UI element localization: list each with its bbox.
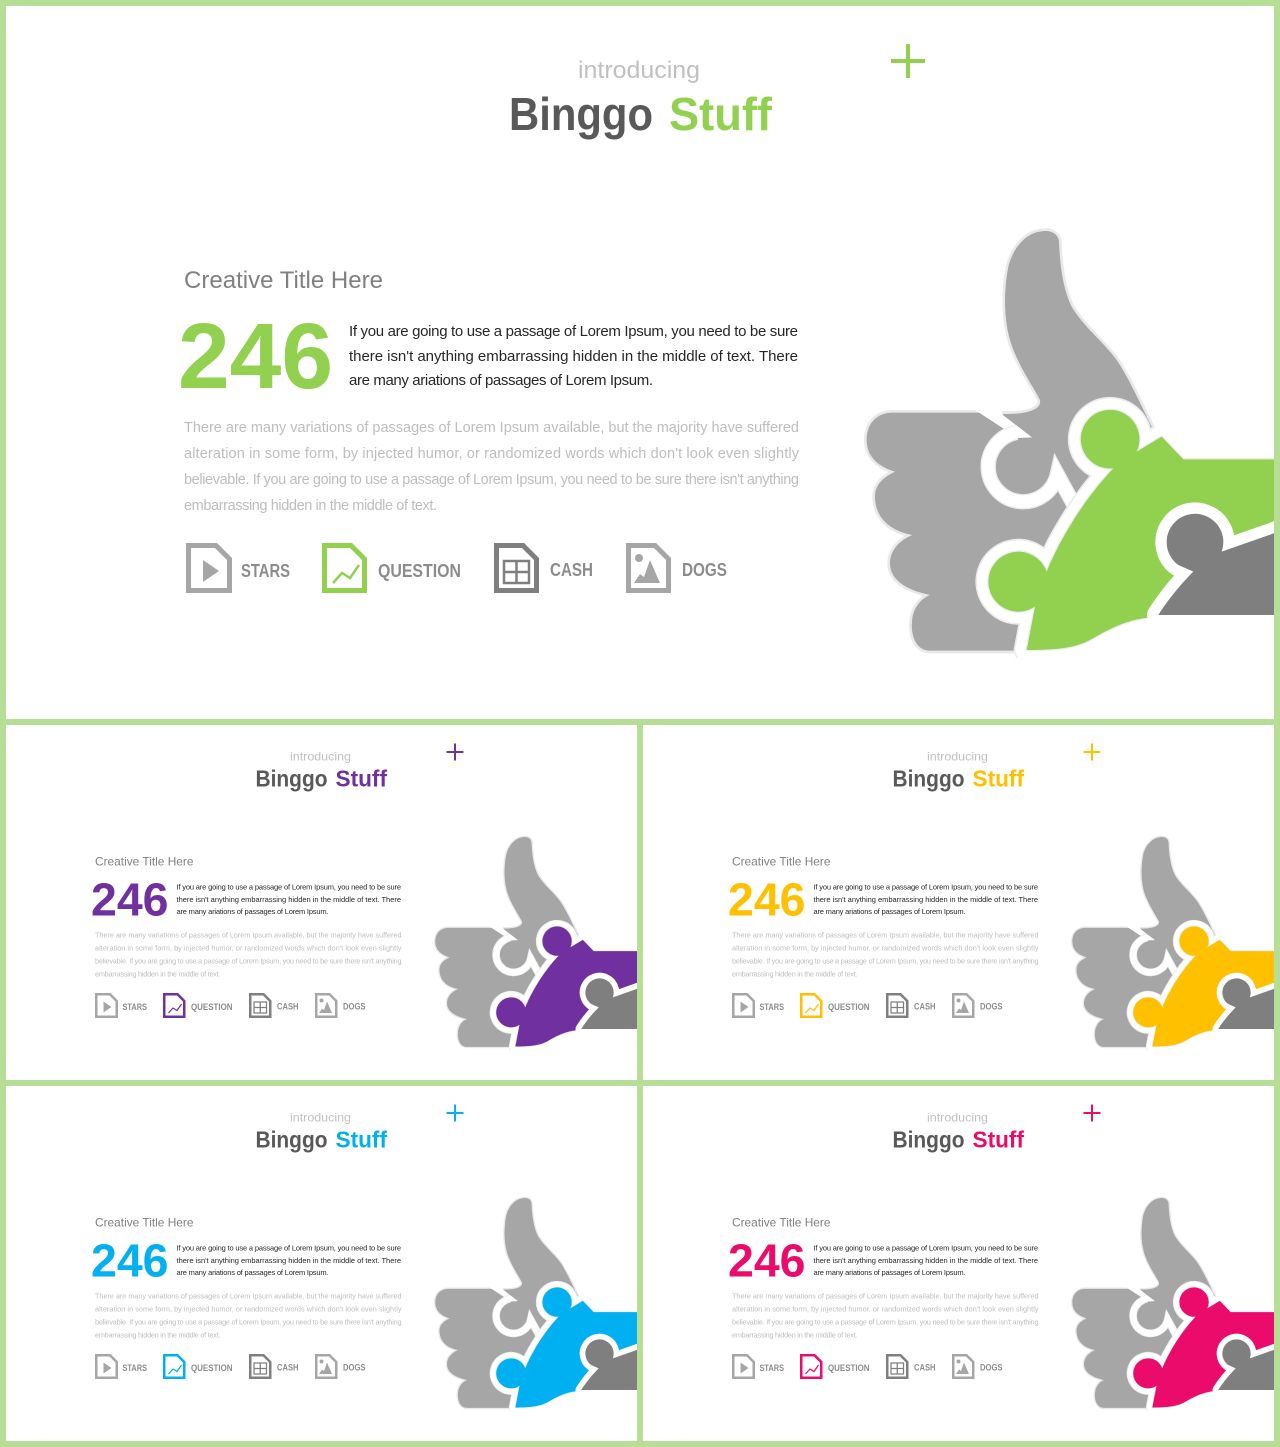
text block: intro paragraph: are many ariations of passages of Lorem Ipsum. <box>176 907 328 916</box>
text block: intro paragraph: there isn't anything embarrassing hidden in the middle of text. There <box>176 1256 401 1265</box>
text block: gray paragraph: believable. If you are going to use a passage of Lorem Ipsum, you need to be sure there isn't anything <box>95 956 402 966</box>
icon: table file <box>496 546 536 590</box>
text block: gray paragraph: alteration in some form, by injected humor, or randomized words which don't look even slightly <box>95 944 402 952</box>
icon: table file <box>887 1355 907 1378</box>
title: introducing <box>290 1110 351 1124</box>
title: Stuff <box>972 1126 1024 1152</box>
title <box>892 1110 1024 1152</box>
label: cash: CASH <box>914 1002 936 1012</box>
title: Binggo <box>892 766 964 792</box>
label: dogs: DOGS <box>980 1362 1002 1372</box>
panel: blue slide <box>6 1086 644 1441</box>
title: Binggo <box>256 766 328 792</box>
title: introducing <box>927 1110 988 1124</box>
text block: gray paragraph: There are many variations of passages of Lorem Ipsum available, but the majority have suffered <box>95 1292 402 1300</box>
icon: chart file <box>324 546 364 590</box>
title: Stuff <box>336 1126 387 1152</box>
icon: table file <box>250 994 270 1017</box>
text block: gray paragraph: There are many variations of passages of Lorem Ipsum available, but the majority have suffered <box>95 930 402 940</box>
title: Stuff <box>669 88 773 140</box>
icon: picture file <box>953 994 973 1017</box>
text block: gray paragraph: embarrassing hidden in the middle of text. <box>95 970 220 978</box>
text block: gray paragraph <box>184 420 800 514</box>
text block: gray paragraph: alteration in some form, by injected humor, or randomized words which don't look even slightly <box>184 446 800 462</box>
label: stars: STARS <box>241 561 290 581</box>
text block: gray paragraph: There are many variations of passages of Lorem Ipsum available, but the majority have suffered <box>732 930 1038 940</box>
title <box>256 750 387 792</box>
icon: puzzle thumbs up hand <box>435 837 644 1047</box>
icon: plus <box>446 1104 464 1122</box>
text block: intro paragraph: If you are going to use a passage of Lorem Ipsum, you need to be sure <box>176 882 401 892</box>
panel: purple slide <box>6 725 644 1080</box>
label: dogs: DOGS <box>682 560 727 580</box>
panel: main green slide <box>6 6 1280 719</box>
title: Binggo <box>509 88 653 140</box>
text block: intro paragraph <box>814 882 1038 916</box>
label: question: QUESTION <box>378 561 461 581</box>
label: dogs: DOGS <box>343 1002 366 1012</box>
icon row <box>96 1355 366 1378</box>
text block: gray paragraph: embarrassing hidden in the middle of text. <box>95 1330 220 1340</box>
icon: plus <box>1084 744 1100 760</box>
label: dogs: DOGS <box>343 1362 366 1372</box>
icon row <box>188 546 727 590</box>
text block: gray paragraph: alteration in some form, by injected humor, or randomized words which don't look even slightly <box>732 1304 1039 1314</box>
text block: gray paragraph: believable. If you are going to use a passage of Lorem Ipsum, you need to be sure there isn't anything <box>732 956 1038 966</box>
icon: play file <box>733 994 754 1017</box>
icon: puzzle thumbs up hand <box>867 231 1280 651</box>
title: introducing <box>927 750 988 764</box>
icon row <box>733 1355 1002 1378</box>
title <box>256 1110 387 1152</box>
label: question: QUESTION <box>191 1363 232 1373</box>
label: stars: STARS <box>122 1002 147 1012</box>
label: dogs: DOGS <box>980 1002 1002 1012</box>
title: introducing <box>290 750 351 764</box>
heading: creative title: Creative Title Here <box>95 1216 194 1230</box>
heading: creative title: Creative Title Here <box>95 854 194 868</box>
text block: gray paragraph: embarrassing hidden in the middle of text. <box>184 498 437 514</box>
label: question: QUESTION <box>828 1363 870 1373</box>
text block: gray paragraph <box>732 1292 1039 1340</box>
text block: intro paragraph <box>349 323 798 389</box>
label: cash: CASH <box>277 1362 298 1372</box>
icon: picture file <box>316 1355 336 1378</box>
icon: plus <box>891 44 925 78</box>
text block: intro paragraph: If you are going to use a passage of Lorem Ipsum, you need to be sure <box>176 1244 401 1252</box>
icon: play file <box>733 1355 754 1378</box>
text block: intro paragraph: are many ariations of passages of Lorem Ipsum. <box>814 907 966 916</box>
text block: intro paragraph: If you are going to use a passage of Lorem Ipsum, you need to be sure <box>349 323 798 340</box>
text block: gray paragraph: believable. If you are going to use a passage of Lorem Ipsum, you need to be sure there isn't anything <box>184 472 799 488</box>
label: cash: CASH <box>550 560 593 580</box>
icon: picture file <box>953 1355 973 1378</box>
label: stars: STARS <box>760 1002 784 1012</box>
text block: gray paragraph <box>732 930 1039 978</box>
heading: creative title: Creative Title Here <box>184 267 383 294</box>
text block: intro paragraph <box>176 882 401 916</box>
text block: gray paragraph <box>95 930 402 978</box>
text block: intro paragraph: are many ariations of passages of Lorem Ipsum. <box>814 1268 966 1277</box>
panel: pink slide <box>643 1086 1280 1441</box>
title: Stuff <box>972 766 1024 792</box>
text block: intro paragraph: there isn't anything embarrassing hidden in the middle of text. There <box>814 1256 1038 1265</box>
big number: 246 <box>91 1234 168 1286</box>
icon: plus <box>446 744 464 760</box>
label: question: QUESTION <box>191 1002 232 1012</box>
text block: gray paragraph: There are many variations of passages of Lorem Ipsum available, but the majority have suffered <box>732 1292 1038 1300</box>
text block: gray paragraph: believable. If you are going to use a passage of Lorem Ipsum, you need to be sure there isn't anything <box>732 1318 1038 1326</box>
text block: gray paragraph: alteration in some form, by injected humor, or randomized words which don't look even slightly <box>95 1304 402 1314</box>
text block: intro paragraph: If you are going to use a passage of Lorem Ipsum, you need to be sure <box>814 1244 1038 1252</box>
title: Binggo <box>256 1126 328 1152</box>
icon: puzzle thumbs up hand <box>1072 837 1280 1047</box>
text block: gray paragraph: alteration in some form, by injected humor, or randomized words which don't look even slightly <box>732 944 1039 952</box>
heading: creative title: Creative Title Here <box>732 854 831 868</box>
text block: intro paragraph <box>176 1244 401 1277</box>
big number: 246 <box>728 1234 806 1286</box>
icon: play file <box>96 1355 117 1378</box>
label: stars: STARS <box>760 1363 784 1373</box>
text block: intro paragraph: are many ariations of passages of Lorem Ipsum. <box>176 1268 328 1277</box>
icon: play file <box>188 546 230 590</box>
icon: table file <box>887 994 907 1017</box>
icon: table file <box>250 1355 270 1378</box>
label: question: QUESTION <box>828 1002 870 1012</box>
title: Binggo <box>892 1126 964 1152</box>
text block: intro paragraph: If you are going to use a passage of Lorem Ipsum, you need to be sure <box>814 882 1038 892</box>
icon: chart file <box>164 994 184 1017</box>
icon: chart file <box>164 1355 184 1378</box>
icon: plus <box>1084 1104 1100 1122</box>
label: cash: CASH <box>277 1002 298 1012</box>
text block: intro paragraph: there isn't anything embarrassing hidden in the middle of text. There <box>176 895 401 904</box>
title: introducing <box>578 57 700 84</box>
big number: 246 <box>91 874 168 926</box>
title: Stuff <box>336 766 387 792</box>
panel: yellow slide <box>643 725 1280 1080</box>
text block: intro paragraph: are many ariations of passages of Lorem Ipsum. <box>349 372 653 389</box>
text block: gray paragraph <box>95 1292 402 1340</box>
icon: picture file <box>316 994 336 1017</box>
title <box>892 750 1024 792</box>
icon row <box>733 994 1002 1017</box>
text block: intro paragraph <box>814 1244 1038 1277</box>
icon: picture file <box>628 546 668 590</box>
text block: intro paragraph: there isn't anything embarrassing hidden in the middle of text. There <box>814 895 1038 904</box>
heading: creative title: Creative Title Here <box>732 1216 831 1230</box>
text block: intro paragraph: there isn't anything embarrassing hidden in the middle of text. There <box>349 348 798 365</box>
icon: chart file <box>801 994 821 1017</box>
text block: gray paragraph: embarrassing hidden in the middle of text. <box>732 1330 858 1340</box>
icon: chart file <box>801 1355 821 1378</box>
text block: gray paragraph: embarrassing hidden in the middle of text. <box>732 970 858 978</box>
big number: 246 <box>178 304 333 408</box>
icon: puzzle thumbs up hand <box>435 1198 644 1408</box>
label: cash: CASH <box>914 1362 936 1372</box>
icon row <box>96 994 366 1017</box>
icon: play file <box>96 994 117 1017</box>
icon: puzzle thumbs up hand <box>1072 1198 1280 1408</box>
big number: 246 <box>728 874 806 926</box>
label: stars: STARS <box>122 1363 147 1373</box>
title <box>509 57 773 140</box>
text block: gray paragraph: There are many variations of passages of Lorem Ipsum available, but the majority have suffered <box>184 420 799 436</box>
text block: gray paragraph: believable. If you are going to use a passage of Lorem Ipsum, you need to be sure there isn't anything <box>95 1318 402 1326</box>
